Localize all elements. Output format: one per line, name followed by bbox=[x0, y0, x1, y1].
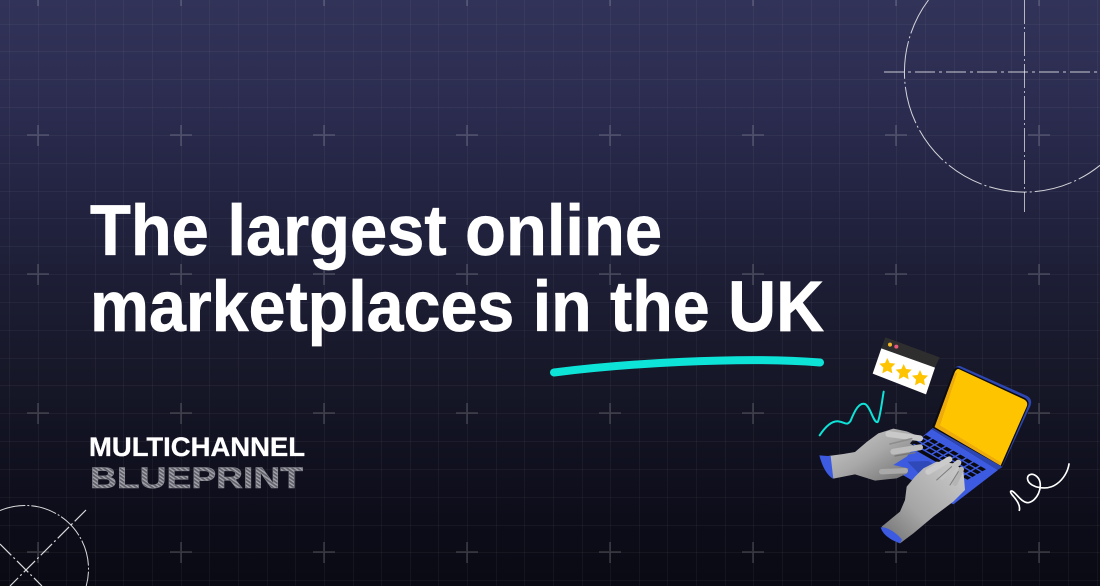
title line 1: The largest online bbox=[90, 192, 662, 271]
logo text: Blueprint: BLUEPRINT bbox=[90, 462, 303, 495]
decorative circle: bottom left blueprint bbox=[0, 505, 89, 586]
illustration: laptop with hands bbox=[818, 338, 1070, 544]
title line 2: marketplaces in the UK bbox=[90, 268, 824, 347]
keyboard bbox=[907, 435, 986, 480]
logo text: Multichannel: MULTICHANNEL bbox=[89, 432, 305, 462]
logo: Multichannel Blueprint bbox=[89, 432, 305, 495]
icon: white curl bbox=[1011, 464, 1069, 510]
decorative circle: top right blueprint bbox=[884, 0, 1100, 212]
laptop bbox=[887, 366, 1031, 504]
icon: teal squiggle bbox=[820, 392, 884, 435]
hand: right bbox=[881, 459, 965, 543]
title bbox=[90, 192, 824, 347]
hand: left bbox=[819, 429, 920, 481]
underline swoosh bbox=[554, 360, 820, 372]
icon: review window with stars bbox=[873, 337, 940, 394]
